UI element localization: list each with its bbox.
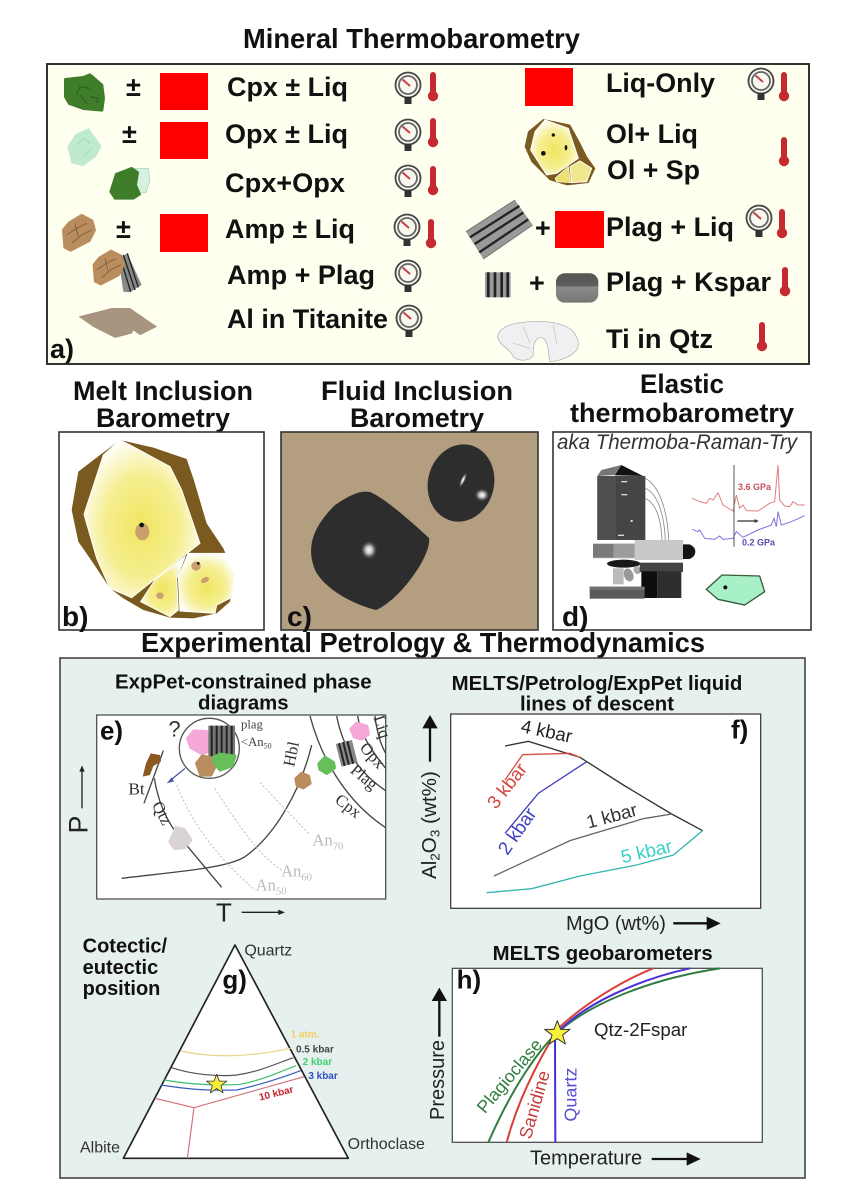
icon: clinopyroxene crystal [65,75,104,110]
thermobarometer labels: Ol+ Liq [606,119,698,149]
thermobarometer labels: Cpx+Opx [225,168,345,198]
panel label d: d) [562,601,588,632]
plus sign: + [529,268,545,298]
pressure labels: 1 atm. [291,1029,320,1040]
small crystal right [178,553,235,613]
heading: Fluid Inclusion Barometry: Barometry [350,403,484,433]
0.5 kbar curve [172,1058,293,1076]
heading: Melt Inclusion Barometry: Barometry [96,403,230,433]
An labels [256,831,343,898]
icon: olivine with spinel [525,119,595,185]
small crystal left [141,557,185,617]
panel g: ternary cotectic diagram [80,936,425,1158]
2 kbar curve [164,1066,296,1085]
microscope [590,465,695,599]
Raman spectra [692,465,805,547]
thermobarometer labels: Ol + Sp [607,155,700,185]
panel h: MELTS geobarometers [427,943,762,1169]
quartz curve [555,968,690,1142]
panel label c: c) [287,601,312,632]
icons: pressure gauges [394,68,774,337]
sanidine curve [507,968,653,1142]
y axis label: 3 [427,830,442,837]
thermobarometer labels [225,68,771,354]
icon: plagioclase striped crystal [466,200,533,259]
heading: lines of descent [520,694,674,716]
plus-minus signs: ± [126,72,141,102]
4 kbar line [505,741,703,831]
heading: MELTS/Petrolog/ExpPet liquid [452,673,742,695]
y axis: Pressure [427,1040,449,1120]
y axis label: (wt%) [418,771,441,830]
host crystal [706,575,765,605]
arrow [167,768,185,783]
clinopyroxene blob [319,757,335,774]
plus-minus signs: ± [116,214,131,244]
chart frame [451,714,761,908]
large olivine crystal [84,440,200,598]
star [545,1021,570,1044]
panel d: elastic thermobarometry [553,431,811,632]
panel f: liquid lines of descent [418,673,761,935]
axis P [63,765,93,833]
line labels: 4 kbar [519,715,574,747]
y axis [427,988,449,1120]
x axis: Temperature [530,1147,642,1169]
apex labels: Albite [80,1139,120,1156]
phase labels: Bt [128,779,145,798]
pressure labels: 0.5 kbar [296,1044,334,1055]
plag label: 50 [264,742,272,751]
phase labels: Plag [347,760,382,794]
mineral assemblage circle [179,718,239,778]
phase boundaries [122,716,386,887]
pressure labels: 2 kbar [303,1057,332,1068]
10 kbar curves [155,1077,304,1158]
line labels [483,715,674,867]
phase labels: Liq [370,713,395,741]
An labels: An [281,862,301,881]
x axis [530,1147,701,1169]
line labels: 5 kbar [619,835,674,867]
panel label f: f) [731,714,748,744]
large fluid inclusion [311,492,429,610]
liquid red squares [160,68,604,252]
pressure labels [258,1029,338,1104]
panel label a: a) [50,334,74,364]
plus-minus signs: ± [122,119,137,149]
panel e: phase diagram [63,671,395,928]
curve labels: Plagioclase [473,1035,546,1117]
phase labels: Cpx [332,790,366,822]
heading: position [83,978,160,1000]
icon: orthopyroxene crystal [68,129,101,165]
spectrum labels [738,482,776,548]
line labels: 3 kbar [483,759,531,812]
icons: thermometers [426,72,790,351]
curve labels: Quartz [561,1068,581,1122]
phase labels: Qtz [148,798,176,828]
heading [115,671,372,714]
thermobarometer labels: Plag + Liq [606,212,734,242]
icon: titanite crystal [79,308,157,338]
plagioclase An contours [177,783,310,890]
line labels: 1 kbar [584,799,639,833]
icon: potassium feldspar [556,273,598,303]
1 kbar line [494,814,672,876]
An labels: 50 [276,887,287,898]
phase labels [128,713,395,828]
heading: ExpPet-constrained phase [115,671,372,693]
panel label h: h) [457,964,481,994]
spectrum labels: 0.2 GPa [742,538,776,548]
plus-minus signs [116,72,141,244]
apex labels: Quartz [244,943,292,960]
icon: amphibole plus plagioclase [94,251,142,292]
3 kbar curve [161,1071,301,1090]
panel b: melt inclusion [59,432,264,632]
heading: Melt Inclusion Barometry [73,376,253,433]
icon: quartz crystal [497,321,578,362]
thermobarometer labels: Amp + Plag [227,260,375,290]
x axis label: MgO (wt%) [566,913,666,935]
glints [457,471,490,502]
orthopyroxene pink blob [351,723,369,739]
thermobarometer labels: Plag + Kspar [606,267,771,297]
thermobarometer labels: Liq-Only [606,68,715,98]
heading [452,673,742,716]
axis T: T [216,898,232,928]
panel label e: e) [100,715,123,745]
title: Experimental Petrology and Thermodynamics: Experimental Petrology & Thermodynamics [141,627,705,658]
thermobarometer labels: Ti in Qtz [606,324,713,354]
plagioclase curve [488,968,720,1142]
line labels: 2 kbar [493,804,540,858]
melt inclusions [135,523,210,599]
plus sign: + [535,213,551,243]
apex labels [80,943,425,1156]
An labels: 60 [301,873,312,884]
An labels: An [256,876,276,895]
An labels: An [312,831,333,850]
apex labels: Orthoclase [348,1136,425,1153]
panel label g: g) [222,964,247,994]
heading: Cotectic/ [83,936,168,958]
axis T [216,898,285,928]
plagioclase icon [336,740,358,767]
thermobarometer labels: Opx ± Liq [225,119,348,149]
panel: experimental petrology background [60,658,805,1178]
panel c: fluid inclusion [281,432,538,632]
curve labels: Sanidine [515,1068,554,1141]
small fluid inclusion [420,437,502,529]
heading: eutectic [83,957,158,979]
heading: Melt Inclusion Barometry: Melt Inclusion [73,376,253,406]
host rim [72,440,235,618]
5 kbar line [487,831,703,893]
spectrum labels: 3.6 GPa [738,482,772,492]
heading: Elastic thermobarometry [570,369,794,428]
chart frame [452,968,762,1142]
thermobarometer labels: Al in Titanite [227,304,388,334]
phase labels: Hbl [279,739,303,768]
panel label b: b) [62,601,88,632]
2 kbar line [505,762,587,833]
plag label [241,718,272,751]
quartz blob [170,827,191,849]
amphibole blob [296,773,310,788]
curve labels [473,1035,581,1141]
thermobarometer labels: Cpx ± Liq [227,72,348,102]
y axis label: O [418,837,441,853]
star [207,1074,227,1093]
phase labels: Opx [356,738,390,773]
question mark: ? [168,717,181,742]
plag label: <An [241,735,264,749]
3 kbar line [505,753,580,780]
icon: small plagioclase [485,272,511,297]
pressure labels: 10 kbar [258,1084,295,1104]
title: Mineral Thermobarometry: Mineral Thermobarometry [243,23,580,54]
heading: Fluid Inclusion Barometry [321,376,513,433]
heading [83,936,168,1000]
y axis label: 2 [427,853,442,861]
y axis label: Al [418,861,441,879]
biotite crystal [143,753,161,777]
icon: amphibole crystal [63,215,95,250]
x axis label [566,913,721,935]
panel a: mineral thermobarometers [47,64,809,364]
heading: Fluid Inclusion Barometry: Fluid Inclusion [321,376,513,406]
axis P: P [63,816,93,833]
heading: MELTS geobarometers [493,943,713,965]
y axis label [418,715,442,879]
1 atm curve [181,1048,291,1056]
olivine crystals with melt inclusions [72,440,235,618]
subtitle: aka Thermoba-Raman-Try [557,431,798,454]
ternary triangle [123,945,348,1158]
icon: clinopyroxene plus orthopyroxene [110,168,150,199]
bubble glow [360,540,378,560]
diagram frame [97,715,386,899]
Qtz-2Fspar label: Qtz-2Fspar [594,1019,687,1040]
An labels: 70 [333,842,343,853]
pressure labels: 3 kbar [308,1071,338,1082]
thermobarometer labels: Amp ± Liq [225,214,355,244]
heading: Elastic thermobarometry: Elastic [640,369,724,399]
heading: Elastic thermobarometry: thermobarometry [570,398,794,428]
heading: diagrams [198,692,289,714]
plag label: plag [241,718,263,732]
